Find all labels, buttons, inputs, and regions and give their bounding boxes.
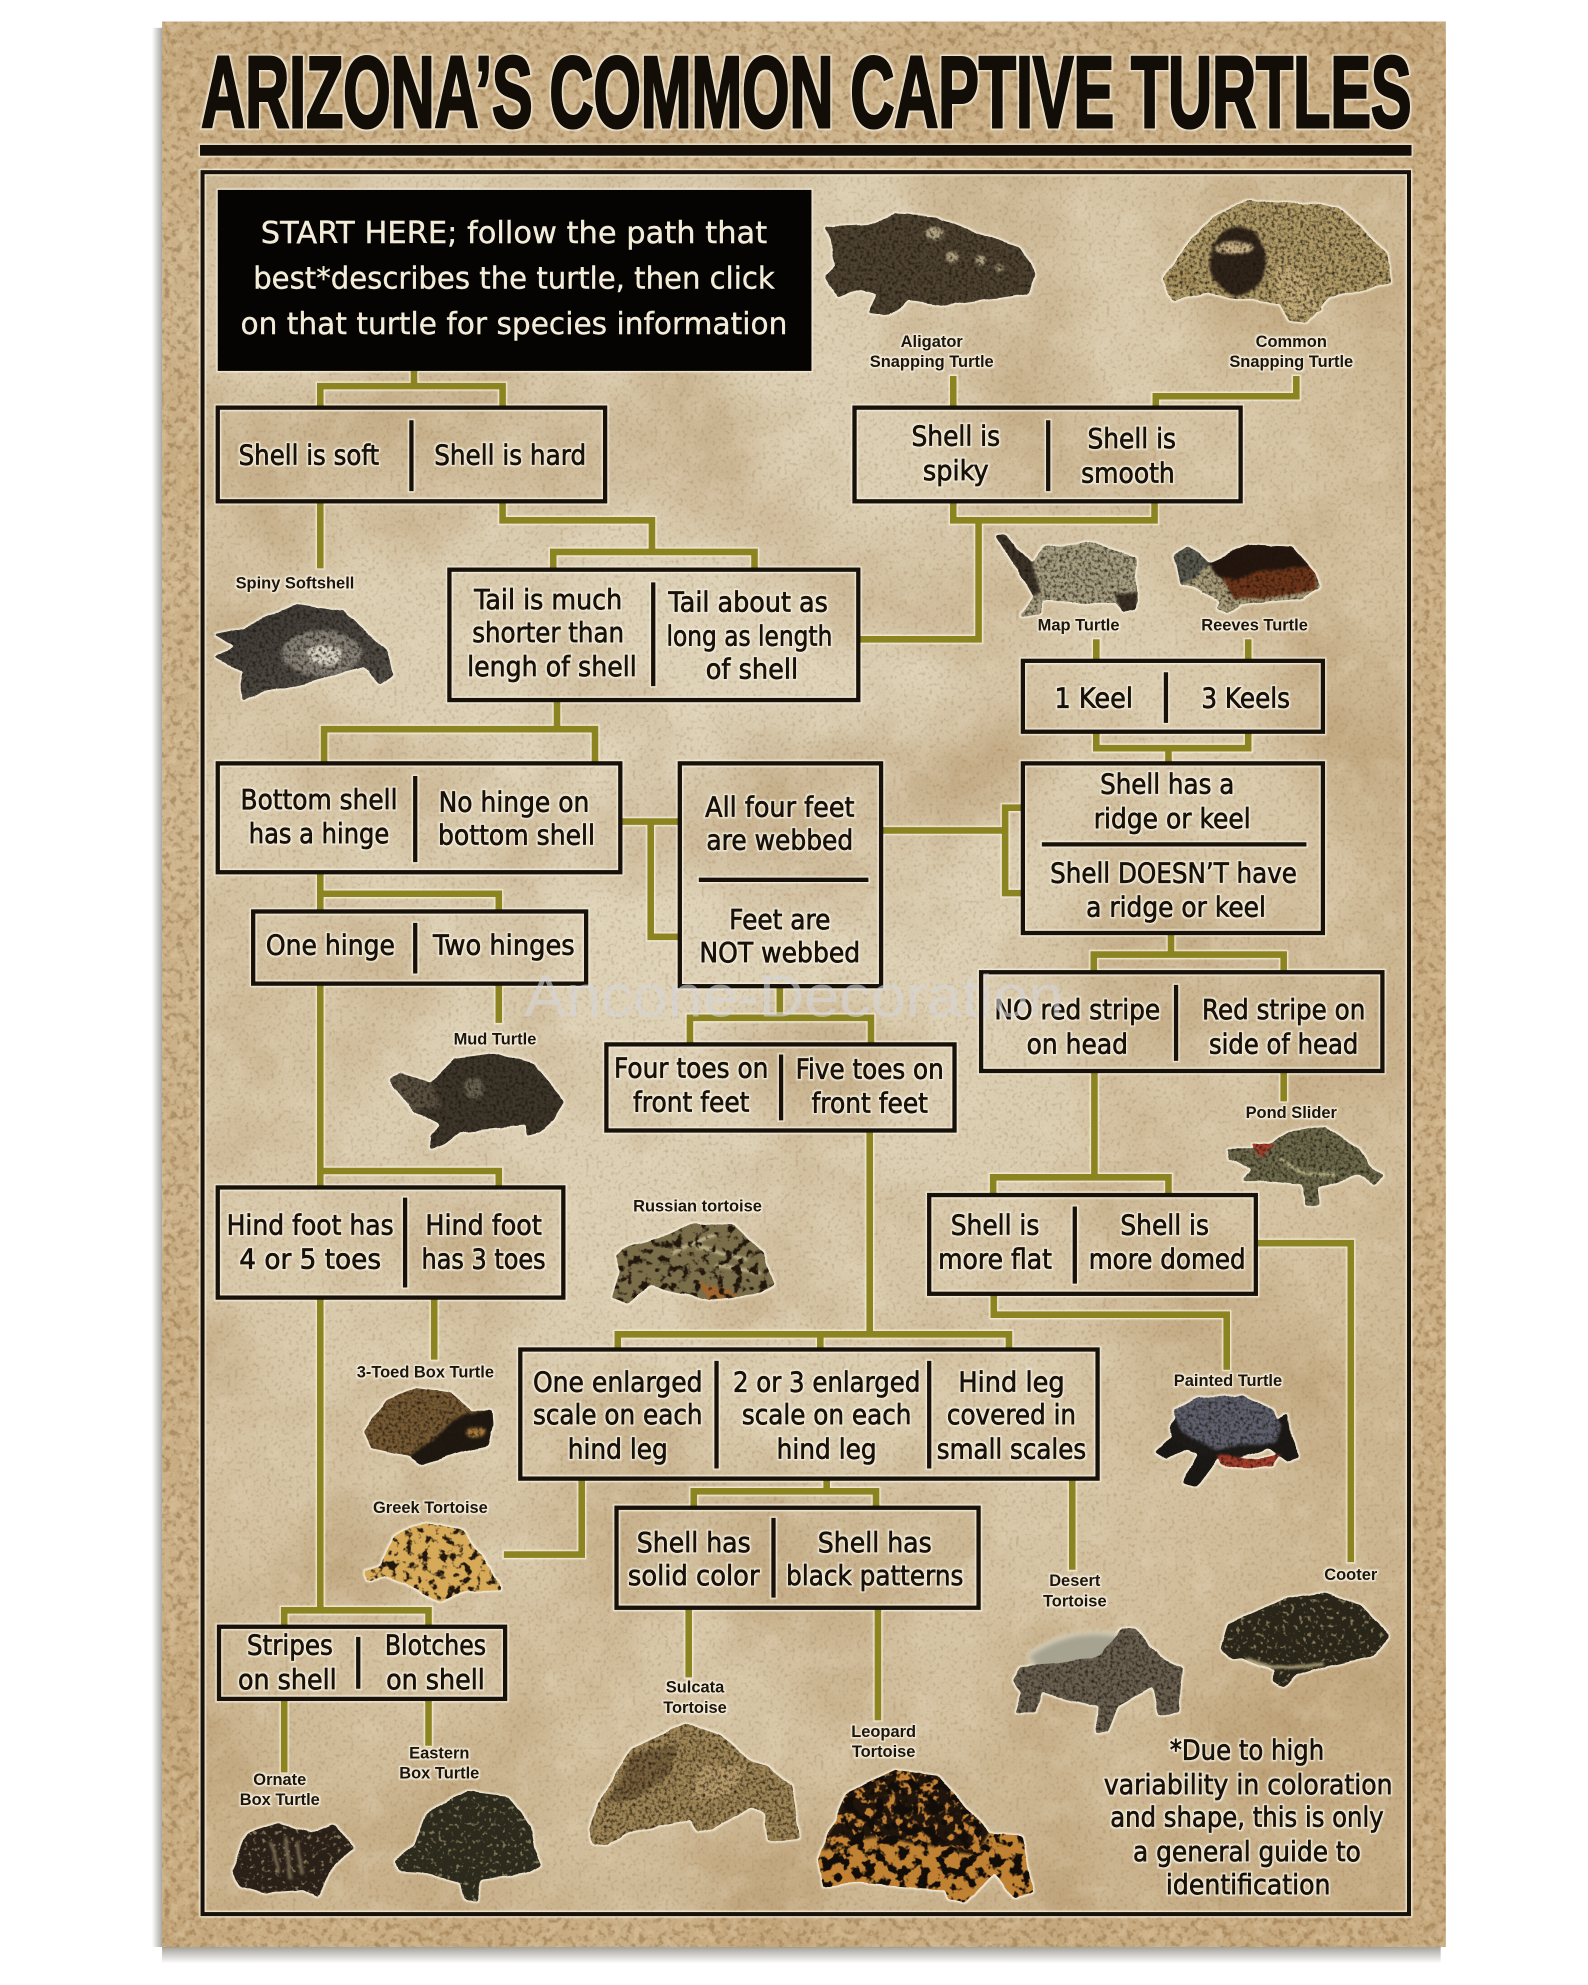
turtle: greek tortoise	[362, 1499, 503, 1603]
footnote: identification	[1166, 1868, 1331, 1901]
decision: shell spiky or smooth: spiky	[923, 454, 989, 487]
turtle: common snapping: Snapping Turtle	[1229, 353, 1353, 371]
turtle: desert tortoise: Tortoise	[1043, 1592, 1107, 1610]
turtle: reeves: Reeves Turtle	[1201, 616, 1308, 634]
turtle: painted	[1155, 1372, 1300, 1487]
turtle: aligator snapping	[824, 214, 1036, 371]
decision: red stripe: NO red stripe	[994, 993, 1160, 1026]
decision: ridge or keel: ridge or keel	[1094, 802, 1251, 835]
poster paper background	[162, 22, 1446, 1947]
turtle: map: Map Turtle	[1038, 616, 1120, 634]
decision: shell soft or hard	[218, 408, 605, 501]
decision: front toes: Four toes on	[614, 1051, 768, 1084]
decision: hind toes: Hind foot	[425, 1208, 542, 1241]
turtle: pond slider: Pond Slider	[1246, 1104, 1338, 1122]
turtle: 3-toed box	[357, 1363, 494, 1465]
decision: webbed feet: NOT webbed	[699, 936, 860, 969]
turtle: 3-toed box: 3-Toed Box Turtle	[357, 1363, 494, 1381]
decision: ridge or keel	[1023, 763, 1323, 933]
start here box: START HERE; follow the path that	[261, 216, 767, 251]
decision: hind leg scales: One enlarged	[533, 1365, 703, 1398]
decision: webbed feet: are webbed	[706, 823, 853, 856]
decision: front toes: front feet	[633, 1085, 750, 1118]
turtle: russian tortoise: Russian tortoise	[633, 1198, 762, 1216]
decision: keels: 1 Keel	[1055, 682, 1133, 715]
turtle: spiny softshell: Spiny Softshell	[236, 575, 354, 593]
decision: stripes or blotches	[219, 1627, 505, 1699]
decision: hind leg scales: scale on each	[533, 1398, 703, 1431]
decision: hind leg scales: hind leg	[568, 1432, 668, 1465]
turtle: aligator snapping: Snapping Turtle	[870, 353, 994, 371]
turtle: eastern box: Box Turtle	[399, 1765, 479, 1783]
decision: tail length	[449, 570, 858, 700]
decision: shell soft or hard: Shell is hard	[434, 439, 586, 472]
decision: tail length: Tail is much	[473, 583, 622, 616]
decision: stripes or blotches: Blotches	[385, 1629, 486, 1662]
decision: hinges: Two hinges	[432, 929, 575, 962]
footnote	[1104, 1734, 1393, 1901]
turtle: leopard tortoise	[818, 1723, 1033, 1903]
decision: shell spiky or smooth: smooth	[1081, 456, 1175, 489]
turtle: greek tortoise: Greek Tortoise	[373, 1499, 488, 1517]
turtle: leopard tortoise: Leopard	[851, 1723, 916, 1741]
decision: hind toes: has 3 toes	[422, 1242, 546, 1275]
decision: tail length: long as length	[667, 620, 832, 653]
turtle: reeves	[1175, 544, 1320, 634]
decision: ridge or keel: a ridge or keel	[1086, 891, 1266, 924]
turtle: sulcata tortoise	[589, 1679, 800, 1846]
decision: shell spiky or smooth: Shell is	[1087, 422, 1176, 455]
turtle: aligator snapping: Aligator	[901, 333, 963, 351]
decision: shell color: black patterns	[786, 1559, 963, 1592]
start here box: best*describes the turtle, then click	[253, 262, 775, 297]
decision: shell spiky or smooth: Shell is	[911, 420, 1000, 453]
turtle: pond slider	[1227, 1104, 1384, 1205]
decision: hind toes: 4 or 5 toes	[239, 1242, 381, 1275]
decision: red stripe: Red stripe on	[1202, 993, 1365, 1026]
decision: hinges: One hinge	[266, 929, 395, 962]
decision: bottom shell hinge: bottom shell	[438, 818, 595, 851]
decision: webbed feet: Feet are	[729, 903, 830, 936]
turtle: sulcata tortoise: Sulcata	[666, 1679, 725, 1697]
footnote: a general guide to	[1133, 1835, 1361, 1868]
turtle: mud: Mud Turtle	[454, 1030, 536, 1048]
decision: stripes or blotches: on shell	[238, 1663, 337, 1696]
turtle: painted: Painted Turtle	[1174, 1372, 1282, 1390]
turtle: common snapping	[1161, 200, 1391, 371]
turtle: eastern box	[394, 1744, 542, 1903]
decision: front toes: front feet	[811, 1087, 928, 1120]
decision: shell color	[617, 1508, 979, 1608]
turtle: mud	[389, 1030, 565, 1149]
decision: hind leg scales: scale on each	[742, 1398, 911, 1431]
turtle: map	[995, 534, 1138, 634]
flowchart connectors	[284, 371, 1351, 1772]
turtle: ornate box: Ornate	[253, 1771, 306, 1789]
decision: webbed feet	[680, 763, 881, 986]
decision: keels	[1023, 661, 1323, 732]
decision: front toes: Five toes on	[796, 1053, 944, 1086]
decision: flat or domed	[929, 1195, 1256, 1294]
decision: bottom shell hinge: No hinge on	[439, 785, 589, 818]
turtle: ornate box: Box Turtle	[240, 1791, 320, 1809]
decision: shell color: solid color	[628, 1559, 760, 1592]
turtle: desert tortoise: Desert	[1049, 1572, 1101, 1590]
decision: hind leg scales: small scales	[937, 1432, 1086, 1465]
turtle: desert tortoise	[1013, 1572, 1182, 1733]
decision: hind leg scales	[520, 1349, 1098, 1479]
decision: ridge or keel: Shell DOESN’T have	[1050, 856, 1297, 889]
turtle: leopard tortoise: Tortoise	[852, 1743, 915, 1761]
decision: shell soft or hard: Shell is soft	[239, 439, 379, 472]
decision: flat or domed: more flat	[938, 1242, 1052, 1275]
footnote: variability in coloration	[1104, 1768, 1393, 1801]
decision: bottom shell hinge	[218, 763, 620, 872]
decision: hind toes: Hind foot has	[227, 1208, 394, 1241]
turtle: russian tortoise	[613, 1198, 775, 1304]
decision: shell color: Shell has	[637, 1526, 751, 1559]
start here box	[218, 190, 811, 371]
turtle: eastern box: Eastern	[409, 1744, 469, 1762]
decision: red stripe	[981, 972, 1382, 1071]
decision: tail length: of shell	[706, 653, 798, 686]
turtle: cooter	[1220, 1566, 1390, 1688]
turtle: spiny softshell	[214, 575, 394, 701]
decision: red stripe: side of head	[1209, 1027, 1358, 1060]
decision: keels: 3 Keels	[1201, 682, 1290, 715]
footnote: *Due to high	[1170, 1734, 1324, 1767]
content frame	[203, 172, 1409, 1914]
decision: shell color: Shell has	[818, 1526, 932, 1559]
watermark: Ancone-Decoration	[524, 963, 1063, 1030]
decision: hinges	[253, 911, 586, 984]
title rule	[200, 145, 1412, 156]
turtle: ornate box	[232, 1771, 354, 1898]
decision: tail length: shorter than	[472, 616, 624, 649]
decision: flat or domed: more domed	[1089, 1242, 1246, 1275]
decision: front toes	[606, 1044, 955, 1130]
decision: hind leg scales: 2 or 3 enlarged	[733, 1365, 920, 1398]
decision: hind leg scales: hind leg	[777, 1432, 877, 1465]
decision: tail length: Tail about as	[668, 585, 828, 618]
decision: bottom shell hinge: Bottom shell	[241, 783, 398, 816]
decision: stripes or blotches: Stripes	[247, 1629, 333, 1662]
start here box: on that turtle for species information	[241, 307, 787, 342]
turtle: cooter: Cooter	[1324, 1566, 1378, 1584]
decision: hind toes	[218, 1187, 563, 1298]
decision: flat or domed: Shell is	[1120, 1208, 1209, 1241]
decision: tail length: lengh of shell	[467, 650, 637, 683]
decision: hind leg scales: Hind leg	[958, 1365, 1065, 1398]
turtle: sulcata tortoise: Tortoise	[663, 1699, 727, 1717]
turtle: common snapping: Common	[1256, 333, 1327, 351]
decision: stripes or blotches: on shell	[386, 1663, 485, 1696]
decision: flat or domed: Shell is	[951, 1208, 1039, 1241]
decision: shell spiky or smooth	[855, 408, 1241, 501]
footnote: and shape, this is only	[1110, 1801, 1384, 1834]
decision: bottom shell hinge: has a hinge	[249, 817, 389, 850]
poster shadow	[152, 28, 1441, 1963]
poster content	[200, 36, 1412, 1914]
decision: red stripe: on head	[1027, 1027, 1128, 1060]
decision: hind leg scales: covered in	[947, 1398, 1076, 1431]
decision: ridge or keel: Shell has a	[1100, 768, 1234, 801]
decision: webbed feet: All four feet	[705, 791, 855, 824]
